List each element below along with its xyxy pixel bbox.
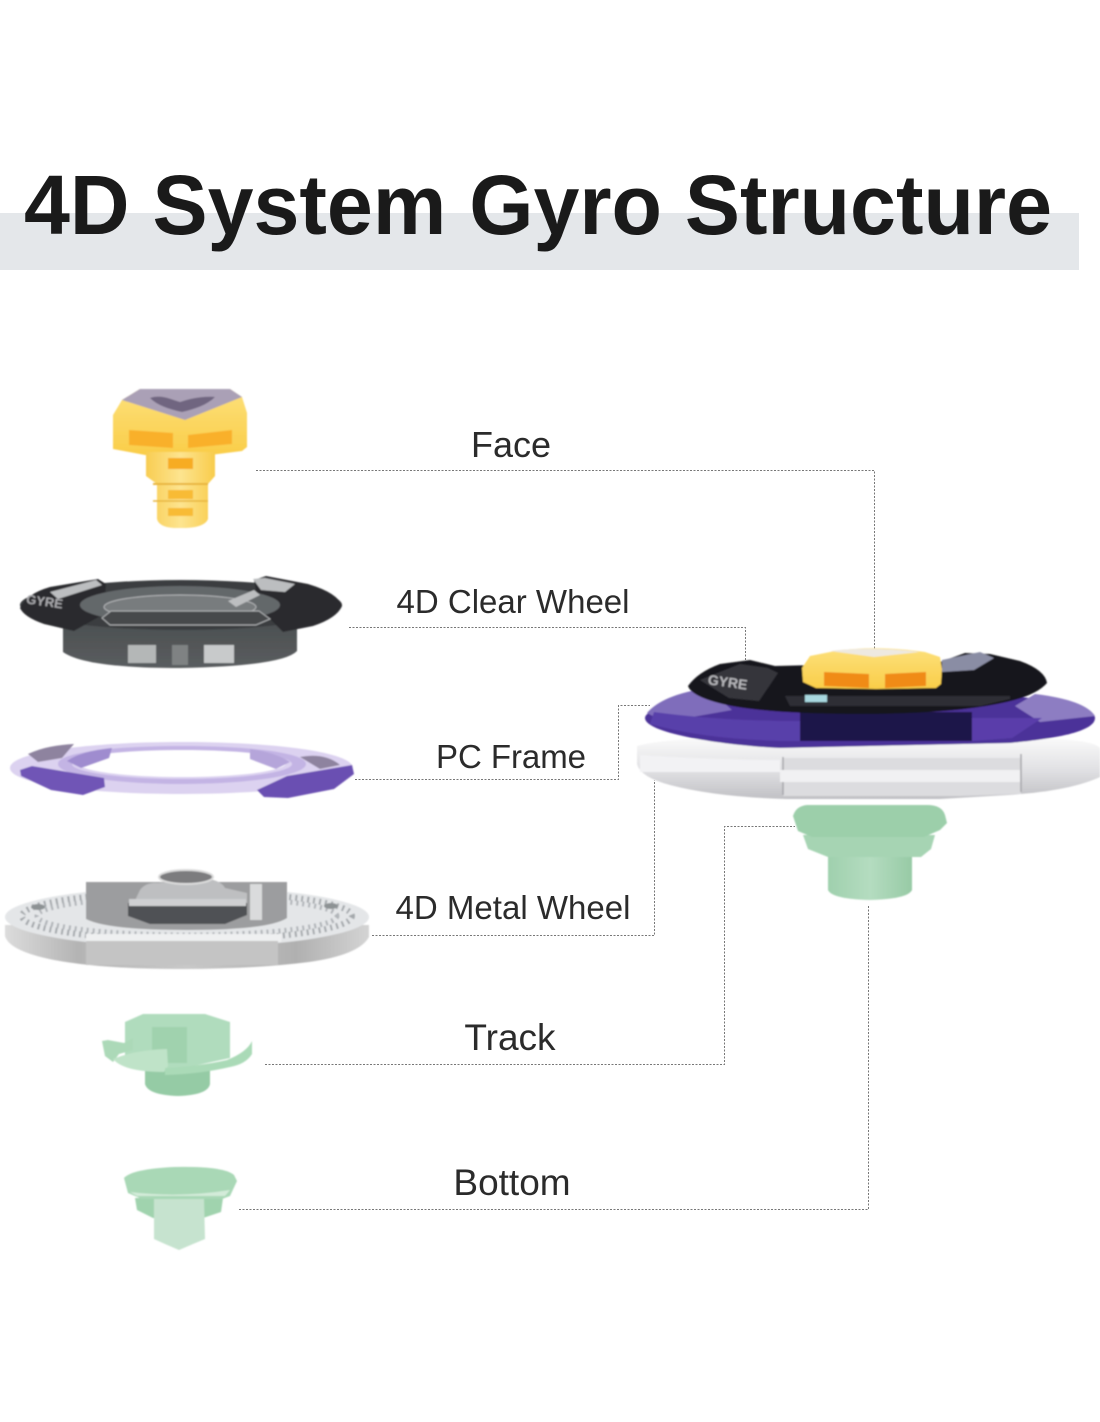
leader line: Bottom bbox=[239, 905, 868, 1210]
assembled: clear wheel bbox=[688, 652, 1047, 714]
assembled: face bbox=[802, 648, 942, 689]
leader line: Face bbox=[256, 470, 874, 655]
leader line: Track bbox=[265, 826, 795, 1064]
title band bbox=[0, 213, 1079, 270]
assembled: metal wheel bbox=[637, 738, 1100, 799]
assembled: clear wheel: GYRE bbox=[707, 671, 748, 693]
label: PC Frame: PC Frame bbox=[436, 738, 586, 775]
label: Bottom: Bottom bbox=[453, 1162, 571, 1203]
label: 4D Metal Wheel: 4D Metal Wheel bbox=[396, 889, 630, 926]
label: Track: Track bbox=[464, 1017, 556, 1058]
part: 4D Clear Wheel: GYRE bbox=[25, 592, 64, 612]
label: Face: Face bbox=[471, 424, 551, 465]
part: Bottom bbox=[124, 1167, 237, 1250]
assembled: track and bottom bbox=[793, 805, 947, 900]
leader line: 4D Metal Wheel bbox=[372, 780, 654, 936]
title: 4D System Gyro Structure bbox=[24, 158, 1052, 252]
assembled gyro bbox=[637, 648, 1100, 900]
part: 4D Clear Wheel bbox=[20, 576, 342, 668]
part: 4D Metal Wheel bbox=[5, 870, 369, 969]
part: PC Frame bbox=[10, 742, 354, 798]
label: 4D Clear Wheel: 4D Clear Wheel bbox=[396, 583, 630, 620]
leader line: PC Frame bbox=[355, 706, 650, 780]
assembled: PC frame bbox=[645, 688, 1095, 748]
part: Track bbox=[102, 1014, 252, 1096]
leader line: 4D Clear Wheel bbox=[349, 628, 746, 670]
part: Face bbox=[113, 389, 247, 528]
